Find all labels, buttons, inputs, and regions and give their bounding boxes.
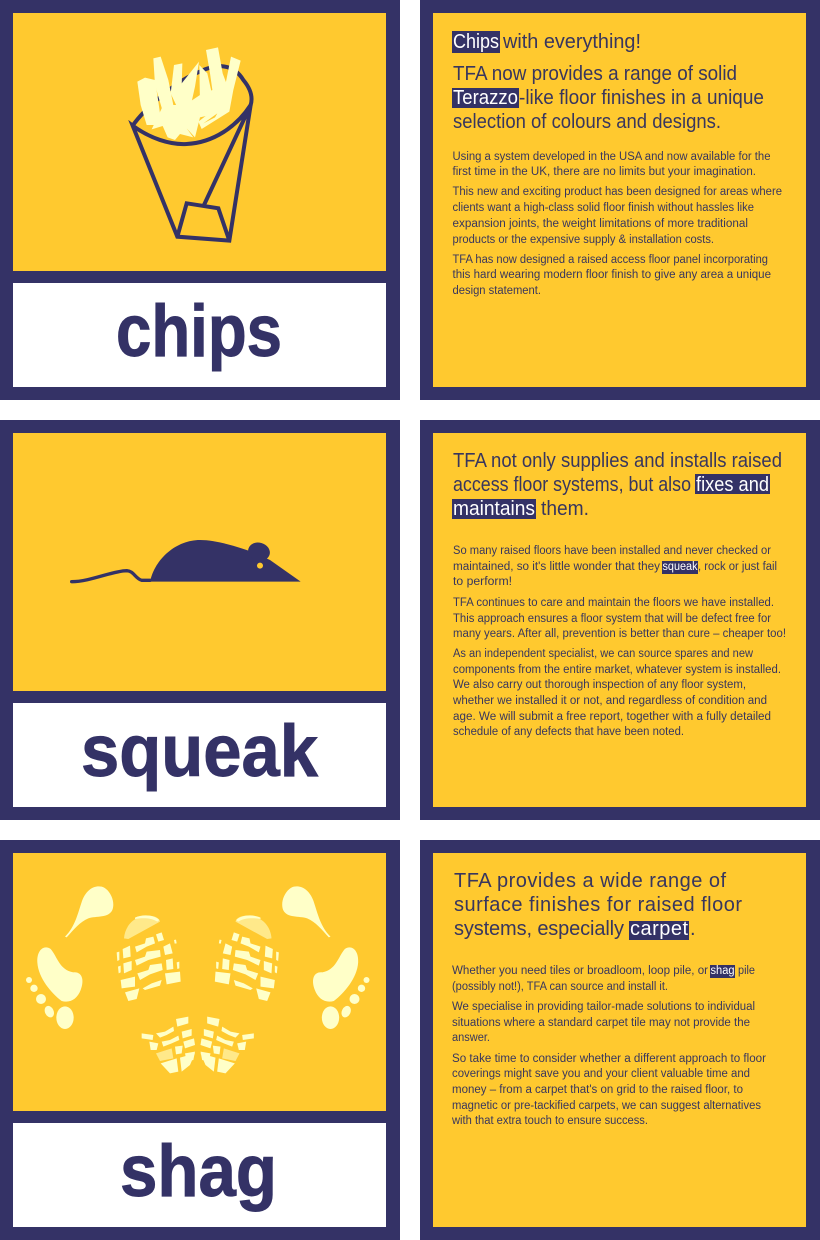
body text: squeak: We also carry out thorough inspection of any floor system,	[453, 679, 746, 691]
icon: right footprints	[201, 886, 370, 1073]
heading: surface finishes	[454, 870, 742, 940]
body text: shag: (possibly not!), TFA can source and install it.	[452, 981, 668, 993]
heading: surface finishes: carpet	[630, 918, 688, 940]
label: chips: chips	[116, 291, 282, 372]
body text: shag	[451, 965, 766, 1127]
body text: shag: shag	[710, 965, 734, 977]
heading: fixes and maintains: access floor systems, but also	[453, 474, 691, 496]
panel: squeak illustration	[0, 420, 400, 820]
body text: squeak: maintained, so it's little wonder that they	[453, 561, 660, 573]
body text: shag: Whether you need tiles or broadloom, loop pile, or	[452, 965, 708, 977]
icon: bag of chips	[133, 47, 252, 241]
body text: chips	[452, 151, 782, 297]
body text: squeak: squeak	[662, 561, 698, 573]
body text: shag: So take time to consider whether a different approach to floor	[452, 1053, 766, 1065]
heading: surface finishes: systems, especially	[454, 918, 624, 940]
body text: shag: answer.	[452, 1032, 490, 1044]
heading: fixes and maintains: maintains	[453, 498, 535, 520]
body text: chips: design statement.	[452, 285, 541, 297]
heading: fixes and maintains	[452, 450, 782, 520]
heading: chips with everything: with everything!	[502, 31, 641, 53]
heading: fixes and maintains: them.	[541, 498, 589, 520]
panel: shag illustration	[0, 840, 400, 1240]
body text: squeak: schedule of any defects that have been noted.	[453, 726, 684, 738]
body text: chips: this hard wearing modern floor finish to give any area a unique	[452, 269, 771, 281]
heading: terazzo intro: TFA now provides a range of solid	[453, 63, 737, 85]
icon: mouse	[72, 540, 301, 582]
body text: squeak: As an independent specialist, we can source spares and new	[453, 648, 754, 660]
heading: terazzo intro	[452, 63, 764, 133]
body text: squeak	[452, 545, 786, 738]
body text: shag: coverings might save you and your client valuable time and	[452, 1068, 750, 1080]
body text: shag: money – from a carpet that's on grid to the raised floor, to	[452, 1084, 743, 1096]
body text: chips: products or the expensive supply & installation costs.	[452, 234, 714, 246]
body text: chips: Using a system developed in the USA and now available for the	[452, 151, 770, 163]
row: chips	[0, 0, 820, 400]
heading: terazzo intro: -like floor finishes in a unique	[519, 87, 764, 109]
body text: chips: This new and exciting product has been designed for areas where	[452, 186, 782, 198]
body text: squeak: whether we installed it or not, and regardless of condition and	[452, 695, 767, 707]
body text: shag: pile	[738, 965, 755, 977]
panel: chips text	[420, 0, 820, 400]
body text: squeak: TFA continues to care and maintain the floors we have installed.	[453, 597, 774, 609]
heading: chips with everything: Chips	[453, 31, 499, 53]
row: shag	[0, 840, 820, 1240]
body text: squeak: , rock or just fail	[698, 561, 777, 573]
panel: shag text	[420, 840, 820, 1240]
icon: left footprints	[26, 886, 195, 1073]
row: squeak	[0, 420, 820, 820]
body text: chips: TFA has now designed a raised access floor panel incorporating	[452, 254, 768, 266]
body text: squeak: age. We will submit a free report, together with a fully detailed	[453, 711, 771, 723]
heading: fixes and maintains: TFA not only supplies and installs raised	[453, 450, 782, 472]
body text: squeak: So many raised floors have been installed and never checked or	[453, 545, 771, 557]
panel: chips illustration	[0, 0, 400, 400]
heading: terazzo intro: selection of colours and designs.	[453, 111, 721, 133]
body text: squeak: many years. After all, prevention is better than cure – cheaper too!	[453, 628, 786, 640]
body text: chips: expansion joints, the weight limitations of more traditional	[452, 218, 748, 230]
heading: fixes and maintains: fixes and	[696, 474, 769, 496]
label: shag: shag	[120, 1131, 277, 1212]
body text: squeak: components from the entire market, whatever system is installed.	[453, 664, 781, 676]
body text: chips: first time in the UK, there are no limits but your imagination.	[452, 166, 756, 178]
body text: shag: with that extra touch to ensure success.	[451, 1115, 648, 1127]
label: squeak: squeak	[81, 711, 318, 792]
heading: surface finishes: surface finishes for raised floor	[454, 894, 742, 916]
heading: surface finishes: TFA provides a wide range of	[454, 870, 726, 892]
heading: terazzo intro: Terazzo	[453, 87, 518, 109]
panel: squeak text	[420, 420, 820, 820]
body text: shag: situations where a standard carpet tile may not provide the	[452, 1017, 750, 1029]
body text: squeak: to perform!	[453, 576, 512, 588]
body text: chips: clients want a high-class solid floor finish without hassles like	[452, 202, 754, 214]
body text: shag: magnetic or pre-tackified carpets, we can suggest alternatives	[452, 1100, 761, 1112]
body text: squeak: This approach ensures a floor system that will be defect free for	[453, 613, 771, 625]
heading: surface finishes: .	[690, 918, 696, 940]
body text: shag: We specialise in providing tailor-made solutions to individual	[452, 1001, 755, 1013]
